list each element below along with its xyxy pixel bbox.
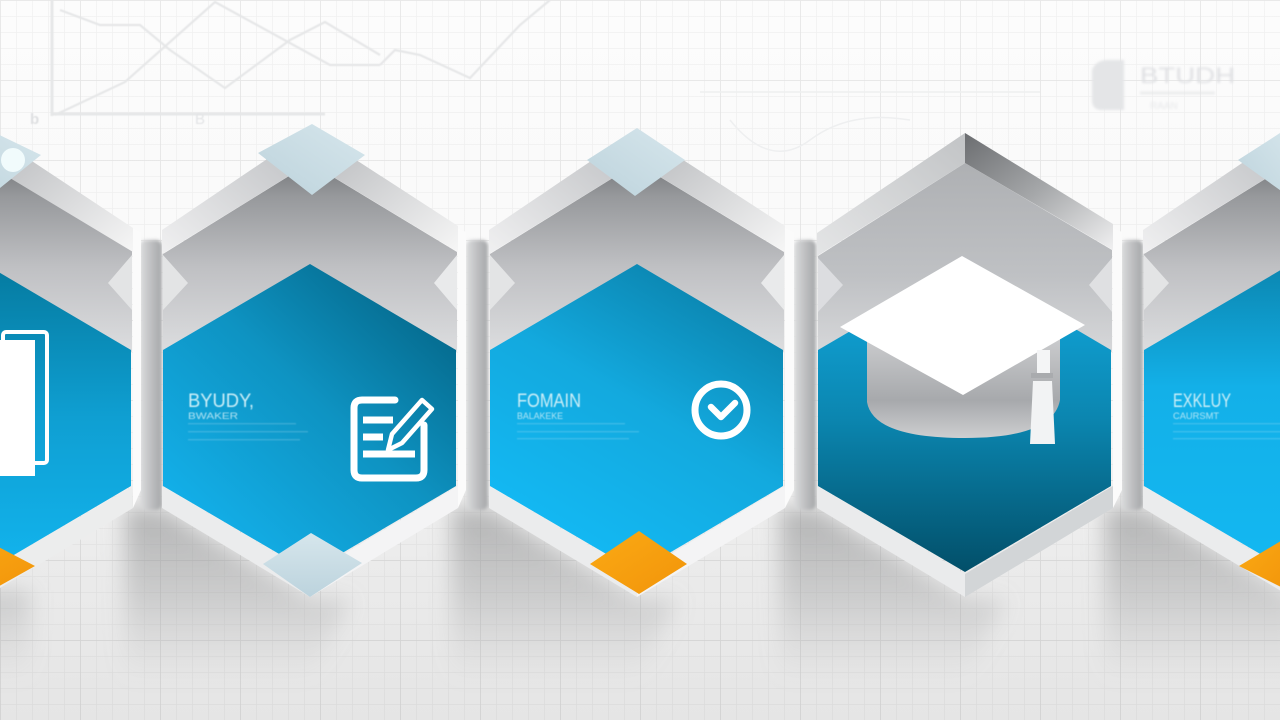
orange diamond — [1239, 535, 1280, 592]
icon: check circle — [695, 384, 747, 436]
hexagon 2 — [162, 124, 466, 597]
top diamond with dot — [0, 128, 41, 200]
text: card 3 — [517, 391, 639, 439]
text: card 5: EXKLUY — [1173, 391, 1231, 412]
hexagon 1 (cropped left) — [0, 128, 141, 597]
faint logo top right — [1092, 60, 1235, 112]
text: card 2: BYUDY, — [188, 391, 254, 412]
faint arcs upper right — [700, 92, 1040, 151]
bottom diamond — [263, 533, 362, 597]
faint line chart top left — [30, 0, 550, 128]
divider shadow bars — [140, 240, 1143, 510]
icon: graduation cap — [840, 256, 1085, 444]
icon: document — [0, 332, 47, 476]
hexagon 3 — [489, 128, 794, 597]
icon: notepad with pencil — [354, 400, 432, 478]
faint logo top right: BTUDH — [1140, 63, 1235, 88]
text: card 5: CAURSMT — [1173, 411, 1220, 421]
hexagon 5 (cropped right) — [1143, 126, 1280, 597]
text: card 3: FOMAIN — [517, 391, 581, 412]
orange diamond — [0, 540, 35, 594]
text: card 2 — [188, 391, 308, 440]
top diamond — [587, 128, 685, 196]
text: card 5 — [1173, 391, 1280, 439]
text: card 2: BWAKER — [188, 411, 239, 421]
top diamond — [1238, 126, 1280, 198]
ground shadows — [0, 508, 1280, 680]
faint line chart top left: b — [30, 111, 39, 128]
text: card 3: BALAKEKE — [517, 411, 563, 421]
hexagon 4 — [817, 133, 1122, 597]
top diamond — [258, 124, 365, 195]
faint line chart top left: B — [195, 111, 205, 128]
orange diamond — [590, 531, 687, 594]
faint logo top right: RAAN — [1150, 101, 1178, 112]
